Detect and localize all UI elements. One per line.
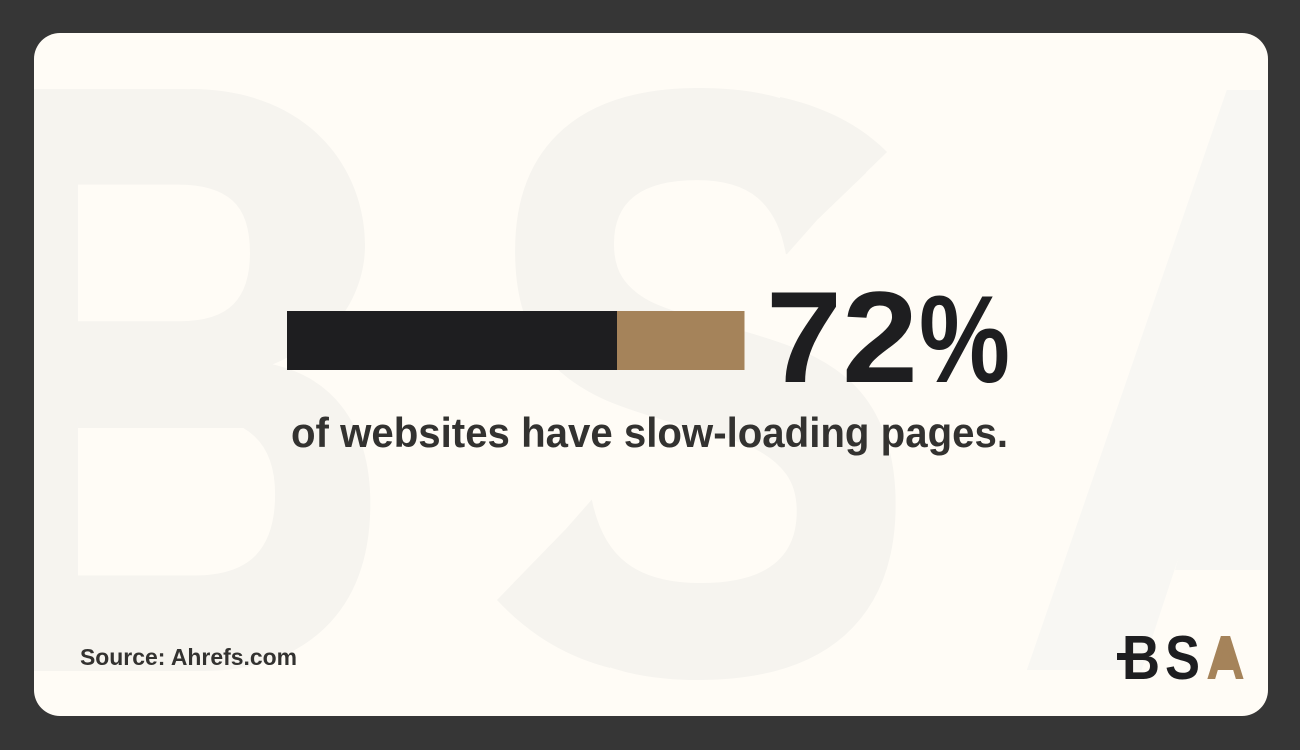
- logo: BSA: [1117, 624, 1245, 693]
- progress bar: [287, 311, 744, 370]
- logo: BSA: A: [1206, 624, 1245, 693]
- caption: of websites have slow-loading pages.: [291, 409, 1008, 456]
- source note: Source: Ahrefs.com: [80, 644, 297, 670]
- logo: BSA: S: [1165, 624, 1200, 693]
- logo: BSA: B: [1122, 624, 1160, 693]
- statistic: 72%: %: [919, 271, 1010, 409]
- statistic: 72%: 72: [766, 264, 918, 410]
- statistic: 72%: [766, 264, 1010, 410]
